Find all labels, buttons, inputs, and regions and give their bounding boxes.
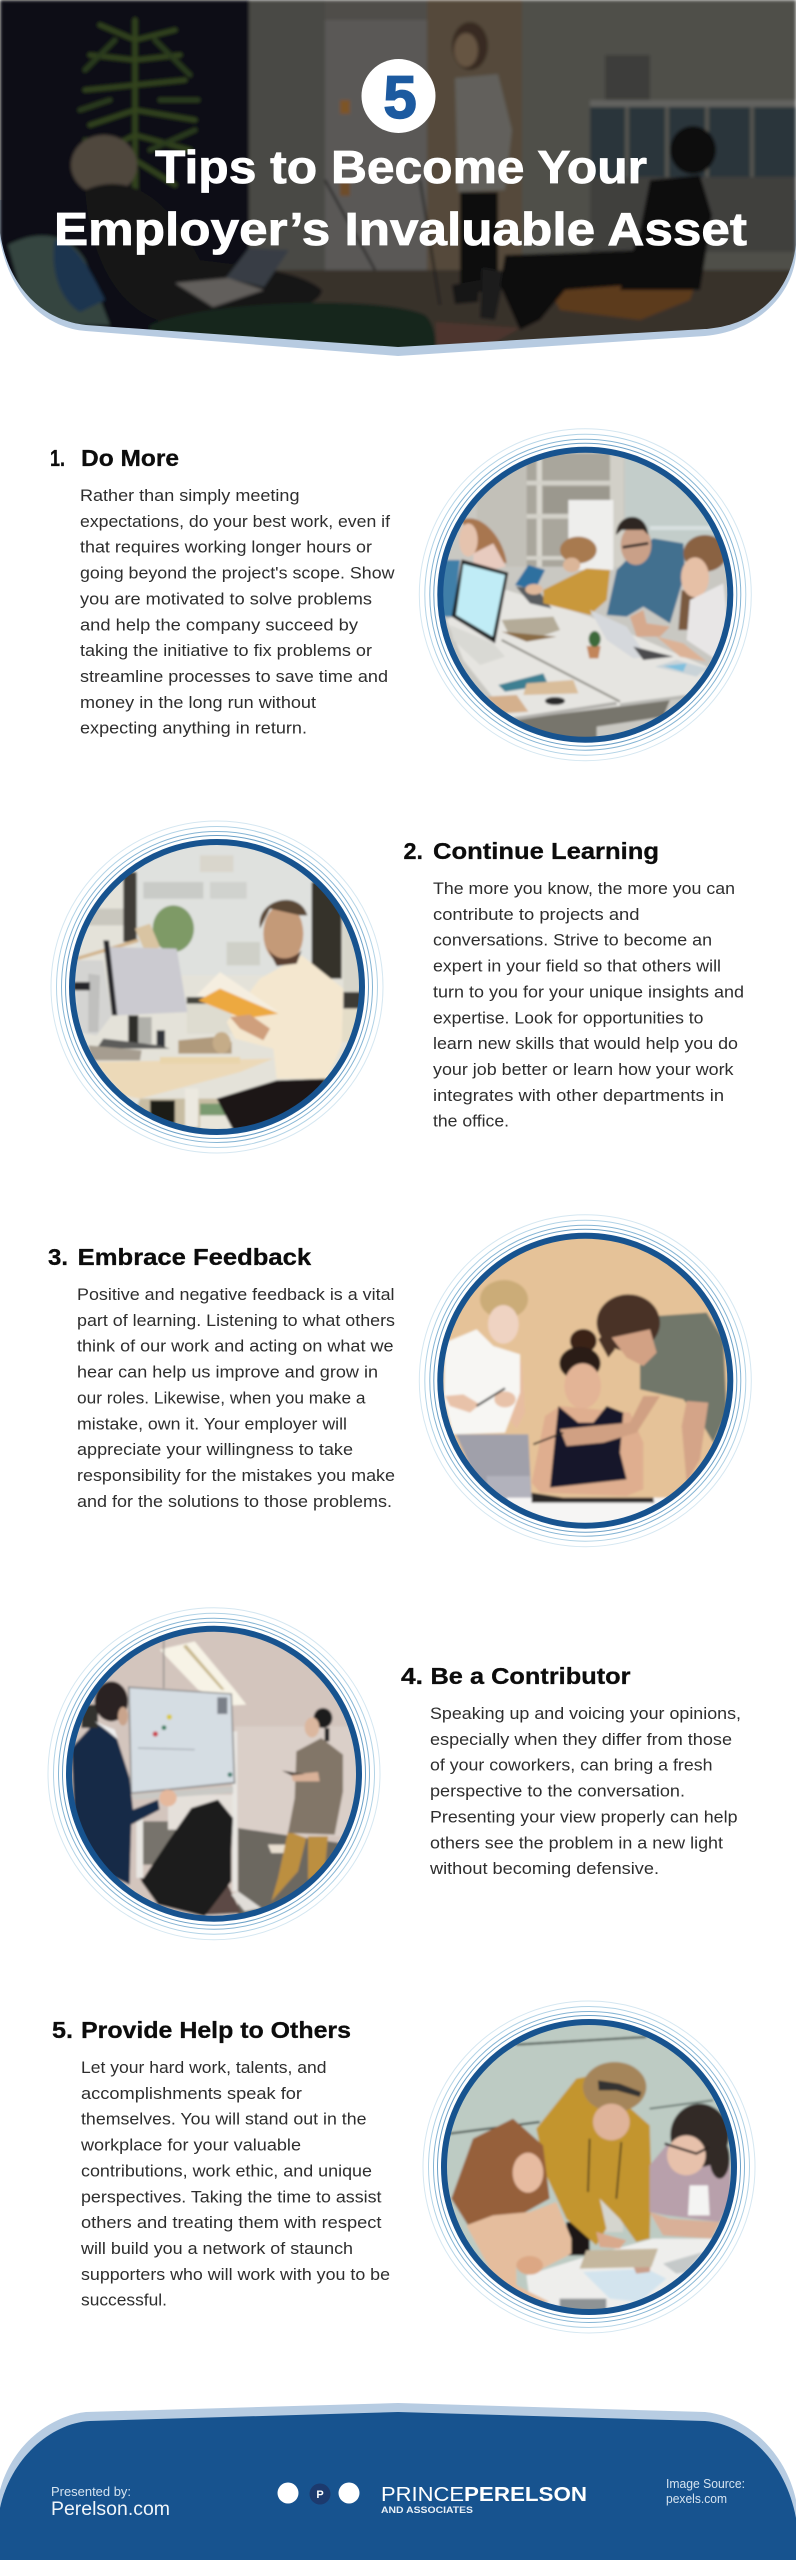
text block: embrace feedback: our roles. Likewise, when you make a	[77, 1389, 366, 1407]
text block: provide help to others: accomplishments speak for	[81, 2085, 303, 2103]
text block: do more: money in the long run without	[80, 694, 316, 712]
text block: embrace feedback: mistake, own it. Your employer will	[77, 1415, 347, 1433]
text block: continue learning: expert in your field so that others will	[433, 958, 721, 976]
text block: continue learning: The more you know, the more you can	[433, 880, 735, 898]
text block: embrace feedback: and for the solutions to those problems.	[77, 1493, 392, 1511]
text block: do more: Rather than simply meeting	[80, 487, 300, 505]
text block: do more: taking the initiative to fix problems or	[80, 642, 373, 660]
text block: do more: going beyond the project's scope. Show	[80, 565, 395, 583]
text block: embrace feedback: hear can help us improve and grow in	[77, 1364, 378, 1382]
text block: provide help to others: successful.	[81, 2292, 167, 2310]
text block: provide help to others: others and treating them with respect	[81, 2214, 382, 2232]
image source: Image Source:	[666, 2476, 745, 2491]
text block: provide help to others: contributions, work ethic, and unique	[81, 2162, 372, 2180]
photo: team at shared desk	[419, 429, 751, 761]
heading: continue learning: 2.	[404, 838, 423, 864]
text block: be a contributor: especially when they differ from those	[430, 1731, 732, 1749]
text block: do more: expectations, do your best work, even if	[80, 513, 390, 531]
title: Employer’s Invaluable Asset	[54, 203, 747, 255]
text block: be a contributor: perspective to the conversation.	[430, 1783, 685, 1801]
footer	[0, 2403, 796, 2560]
text block: do more: streamline processes to save time and	[80, 668, 388, 686]
text block: embrace feedback: Positive and negative feedback is a vital	[77, 1286, 395, 1304]
text block: provide help to others: Let your hard work, talents, and	[81, 2059, 326, 2077]
panel: tip 3	[48, 1215, 751, 1547]
text block: do more: you are motivated to solve problems	[80, 590, 372, 608]
heading: embrace feedback: 3.	[48, 1244, 68, 1270]
heading: do more: 1.	[50, 445, 65, 471]
heading: provide help to others: Provide Help to Others	[81, 2017, 351, 2043]
text block: be a contributor	[429, 1705, 741, 1878]
text block: embrace feedback	[77, 1286, 395, 1511]
panel: tip 2	[51, 821, 744, 1153]
panel: tip 4	[48, 1608, 741, 1940]
badge: number 5	[362, 59, 436, 133]
heading: do more: Do More	[81, 445, 179, 471]
badge: number 5: 5	[383, 64, 417, 131]
text block: be a contributor: without becoming defensive.	[429, 1860, 659, 1878]
logo: prince perelson: PRINCE	[381, 2484, 464, 2506]
text block: continue learning: the office.	[433, 1113, 509, 1131]
text block: continue learning: integrates with other departments in	[433, 1087, 724, 1105]
text block: continue learning: contribute to projects and	[433, 906, 640, 924]
text block: continue learning: your job better or learn how your work	[433, 1061, 734, 1079]
text block: continue learning: conversations. Strive to become an	[433, 932, 712, 950]
photo: three colleagues at laptop	[419, 1215, 751, 1547]
text block: provide help to others: will build you a network of staunch	[80, 2240, 353, 2258]
text block: be a contributor: Speaking up and voicing your opinions,	[430, 1705, 741, 1723]
photo: students around tablet	[423, 2001, 755, 2333]
logo: prince perelson: P	[316, 2489, 324, 2501]
text block: do more: that requires working longer hours or	[80, 539, 373, 557]
presented by	[51, 2484, 170, 2520]
logo: prince perelson	[278, 2482, 587, 2516]
heading: embrace feedback: Embrace Feedback	[78, 1244, 312, 1270]
text block: continue learning	[433, 880, 744, 1131]
heading: be a contributor: 4.	[401, 1663, 423, 1689]
heading: provide help to others: 5.	[52, 2017, 73, 2043]
text block: provide help to others: themselves. You will stand out in the	[81, 2111, 366, 2129]
text block: be a contributor: others see the problem in a new light	[430, 1834, 723, 1852]
panel: tip 1	[50, 429, 751, 761]
title: Tips to Become Your	[155, 141, 647, 193]
text block: do more: expecting anything in return.	[80, 720, 307, 738]
text block: continue learning: turn to you for your unique insights and	[433, 983, 744, 1001]
text block: do more	[80, 487, 395, 738]
text block: provide help to others: workplace for your valuable	[80, 2137, 301, 2155]
heading: be a contributor: Be a Contributor	[430, 1663, 630, 1689]
panel: tip 5	[52, 2001, 755, 2333]
text block: be a contributor: of your coworkers, can bring a fresh	[430, 1757, 712, 1775]
text block: do more: and help the company succeed by	[80, 616, 359, 634]
text block: embrace feedback: think of our work and acting on what we	[77, 1338, 394, 1356]
heading: continue learning: Continue Learning	[433, 838, 659, 864]
text block: embrace feedback: part of learning. Listening to what others	[77, 1312, 395, 1330]
presented by: Presented by:	[51, 2484, 131, 2499]
presented by: Perelson.com	[51, 2499, 170, 2520]
photo: whiteboard meeting	[48, 1608, 380, 1940]
photo: man reading at desk	[51, 821, 383, 1153]
text block: provide help to others: perspectives. Taking the time to assist	[81, 2188, 382, 2206]
image source	[666, 2476, 745, 2506]
text block: continue learning: expertise. Look for opportunities to	[433, 1009, 704, 1027]
logo: prince perelson: PERELSON	[464, 2484, 587, 2506]
text block: provide help to others	[80, 2059, 390, 2310]
text block: provide help to others: supporters who will work with you to be	[81, 2266, 390, 2284]
text block: continue learning: learn new skills that would help you do	[433, 1035, 738, 1053]
text block: embrace feedback: appreciate your willingness to take	[77, 1441, 353, 1459]
text block: embrace feedback: responsibility for the mistakes you make	[77, 1467, 395, 1485]
logo: prince perelson: AND ASSOCIATES	[381, 2505, 473, 2516]
image source: pexels.com	[666, 2491, 727, 2506]
text block: be a contributor: Presenting your view properly can help	[430, 1808, 738, 1826]
title	[54, 141, 747, 255]
header banner	[0, 0, 796, 360]
